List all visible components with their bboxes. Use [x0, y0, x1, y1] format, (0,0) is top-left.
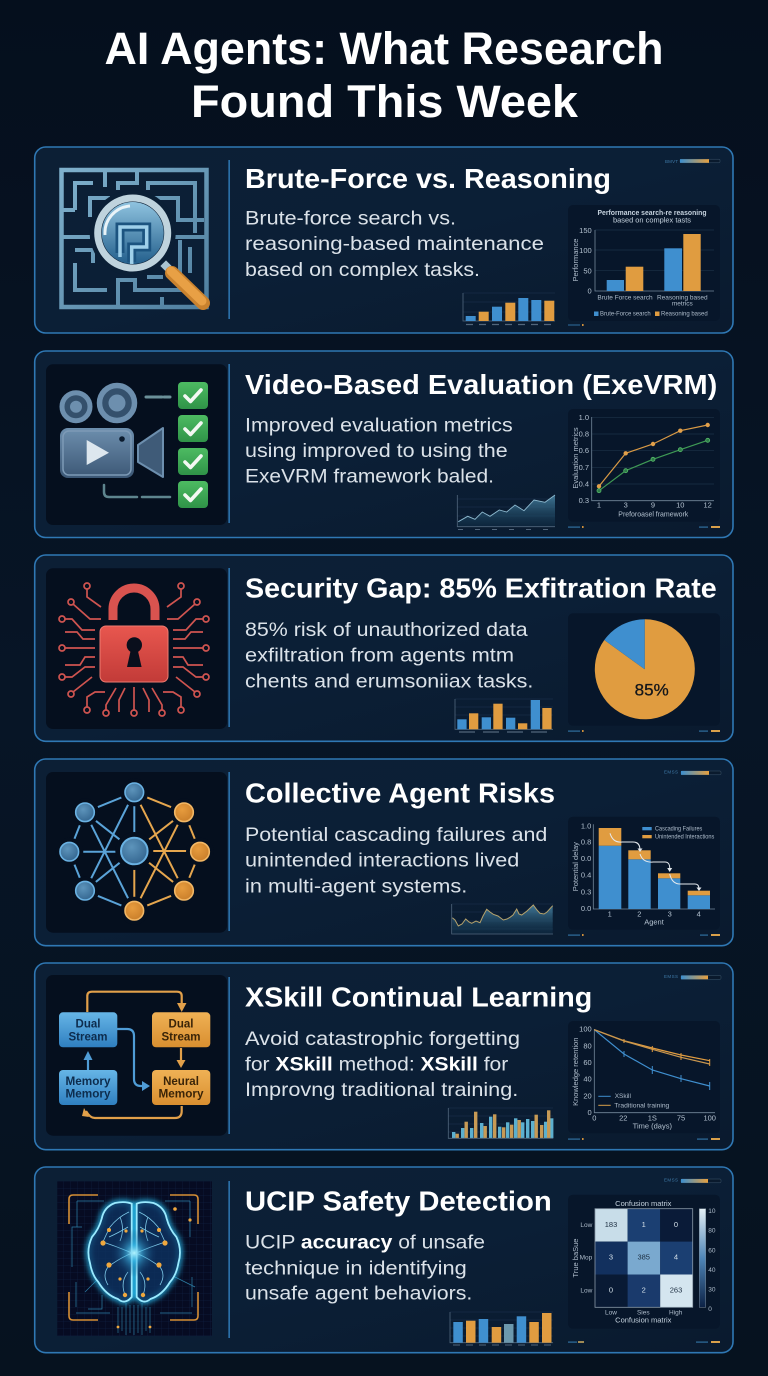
mini bar chart	[463, 293, 555, 324]
stacked bar chart: agent: 3	[668, 910, 672, 919]
line chart: knowledge retention	[568, 1021, 720, 1133]
confusion matrix: 183	[605, 1220, 617, 1229]
line chart: knowledge retention: 75	[677, 1114, 685, 1123]
text block: exfiltration from agents mtm	[245, 645, 514, 667]
line chart: evaluation metrics: Preforoasel framework	[618, 510, 689, 519]
text block: Potential cascading failures and	[245, 824, 547, 846]
confusion matrix: Mop	[580, 1255, 593, 1262]
bar chart: performance: metrics	[672, 301, 694, 308]
heading: UCIP Safety Detection	[245, 1185, 552, 1216]
confusion matrix: 263	[670, 1286, 682, 1295]
stacked bar chart: agent: Cascading Failures	[655, 826, 703, 833]
stacked bar chart: agent: 1	[608, 910, 612, 919]
confusion matrix: Low	[605, 1309, 617, 1316]
stacked bar chart: agent: Agent	[644, 917, 665, 926]
text block: unsafe agent behaviors.	[245, 1283, 472, 1305]
line chart: knowledge retention: 0	[592, 1114, 596, 1123]
text block	[245, 414, 513, 488]
confusion matrix: 0	[674, 1220, 678, 1229]
text block: unintended interactions lived	[245, 850, 519, 872]
mini area chart	[457, 495, 555, 530]
pie chart: 85%	[568, 613, 720, 726]
title	[104, 23, 664, 127]
confusion matrix: 60	[708, 1248, 716, 1254]
confusion matrix	[568, 1195, 720, 1329]
confusion matrix: 4	[674, 1253, 678, 1262]
line chart: evaluation metrics: 1.0	[579, 413, 589, 422]
icon panel: memory flow diagram: Memory	[66, 1076, 111, 1088]
mini area chart	[452, 904, 553, 934]
text block: in multi-agent systems.	[245, 875, 467, 897]
line chart: evaluation metrics: 10	[676, 500, 684, 509]
text block: Improvng traditional training.	[245, 1079, 518, 1101]
text block: technique in identifying	[245, 1257, 467, 1279]
text block	[245, 1028, 520, 1101]
bar chart: performance: Performance search-re reasoning	[598, 208, 707, 217]
footer marks	[568, 324, 584, 326]
stacked bar chart: agent: 2	[637, 910, 641, 919]
line chart: knowledge retention: 80	[583, 1041, 592, 1050]
confusion matrix: High	[669, 1309, 683, 1316]
mini grouped bar chart	[448, 1108, 553, 1138]
pie chart: 85%: 85%	[635, 681, 669, 700]
text block: chents and erumsoniiax tasks.	[245, 670, 533, 692]
line chart: knowledge retention: 22	[619, 1114, 627, 1123]
meter	[665, 159, 720, 164]
confusion matrix: Low	[580, 1222, 593, 1229]
line chart: knowledge retention: 60	[583, 1058, 592, 1067]
line chart: evaluation metrics: 0.4	[579, 480, 589, 488]
confusion matrix: Sies	[637, 1309, 650, 1316]
stacked bar chart: agent	[568, 817, 720, 930]
heading: Video-Based Evaluation (ExeVRM)	[245, 369, 717, 400]
stacked bar chart: agent: 0.4	[581, 871, 591, 880]
icon panel: video camera and checks	[46, 364, 230, 525]
confusion matrix: True baSue	[571, 1239, 580, 1277]
bar chart: performance: Brute Force search	[597, 294, 653, 301]
heading: Collective Agent Risks	[245, 777, 555, 808]
text block: for XSkill method: XSkill for	[245, 1054, 509, 1076]
stacked bar chart: agent: 0.8	[581, 837, 591, 846]
confusion matrix: Confusion matrix	[615, 1199, 672, 1208]
bar chart: performance: 100	[579, 246, 592, 255]
line chart: knowledge retention: 20	[583, 1091, 592, 1100]
text block: Avoid catastrophic forgetting	[245, 1028, 520, 1050]
bar chart: performance: Brute-Force search	[600, 311, 651, 318]
bar chart: performance: 50	[583, 266, 592, 276]
line chart: knowledge retention: Traditional training	[614, 1102, 670, 1109]
icon: maze with magnifying glass	[62, 170, 206, 307]
text block: reasoning-based maintenance	[245, 233, 544, 255]
line chart: evaluation metrics: 9	[651, 500, 655, 509]
line chart: knowledge retention: 100	[703, 1114, 716, 1123]
stacked bar chart: agent: Unintended Interactions	[655, 833, 715, 840]
footer marks	[568, 1138, 720, 1140]
line chart: evaluation metrics: 3	[624, 500, 628, 509]
line chart: evaluation metrics: 1	[597, 500, 601, 509]
title: Found This Week	[191, 76, 579, 127]
meter: EMSS	[664, 770, 678, 774]
heading: Brute-Force vs. Reasoning	[245, 163, 611, 194]
text block	[245, 1232, 485, 1305]
confusion matrix: 3	[609, 1253, 613, 1262]
confusion matrix: 40	[708, 1267, 716, 1274]
text block: 85% risk of unauthorized data	[245, 619, 528, 641]
mini bar chart	[455, 699, 553, 732]
text block: ExeVRM framework baled.	[245, 466, 494, 488]
bar chart: performance	[568, 205, 720, 321]
footer marks	[568, 526, 720, 528]
confusion matrix: 10	[708, 1208, 716, 1215]
confusion matrix: Confusion matrix	[615, 1316, 672, 1325]
confusion matrix: 0	[708, 1306, 712, 1313]
meter	[664, 770, 721, 775]
line chart: evaluation metrics	[568, 409, 720, 522]
footer marks	[568, 1341, 720, 1343]
text block: UCIP accuracy of unsafe	[245, 1232, 485, 1254]
stacked bar chart: agent: 4	[697, 910, 701, 919]
bar chart: performance: based on complex tasts	[613, 216, 691, 225]
confusion matrix: 2	[642, 1286, 646, 1295]
bar chart: performance: Reasoning based	[657, 294, 708, 301]
line chart: knowledge retention: 1S	[648, 1114, 657, 1123]
panel: video-based evaluation	[35, 351, 733, 538]
text block: Improved evaluation metrics	[245, 414, 513, 436]
line chart: evaluation metrics: 12	[704, 500, 712, 509]
confusion matrix: 1	[642, 1220, 646, 1229]
line chart: knowledge retention: 0	[588, 1108, 592, 1117]
footer marks	[568, 934, 720, 936]
icon panel: agent network	[46, 772, 230, 933]
line chart: evaluation metrics: 0.7	[579, 463, 589, 472]
text block: using improved to using the	[245, 440, 508, 462]
stacked bar chart: agent: 1.0	[581, 821, 591, 830]
heading: Security Gap: 85% Exfitration Rate	[245, 572, 717, 603]
line chart: evaluation metrics: Evaluation metrics	[571, 427, 580, 489]
mini bar chart	[450, 1312, 553, 1345]
confusion matrix: 30	[708, 1286, 716, 1294]
heading: XSkill Continual Learning	[245, 982, 592, 1013]
bar chart: performance: Reasoning based	[661, 311, 708, 318]
panel: xskill continual learning	[35, 963, 733, 1150]
panel: collective agent risks	[35, 759, 733, 946]
title: AI Agents: What Research	[104, 23, 664, 74]
meter	[664, 1178, 721, 1183]
line chart: knowledge retention: 40	[583, 1075, 592, 1084]
panel: security gap	[35, 555, 733, 741]
text block	[245, 824, 547, 897]
confusion matrix: 385	[637, 1253, 650, 1262]
line chart: evaluation metrics: 0.8	[579, 430, 589, 438]
meter: EMSS	[664, 1178, 678, 1182]
meter: BMVT	[665, 159, 678, 164]
confusion matrix: 80	[708, 1228, 716, 1234]
panel: ucip safety detection	[35, 1167, 733, 1353]
icon panel: memory flow diagram: Memory	[66, 1089, 111, 1101]
text block: Brute-force search vs.	[245, 207, 456, 229]
icon panel: memory flow diagram: Stream	[162, 1031, 200, 1043]
stacked bar chart: agent: Potential delay	[571, 842, 580, 891]
line chart: knowledge retention: Time (days)	[633, 1121, 672, 1130]
text block: based on complex tasks.	[245, 259, 480, 281]
line chart: evaluation metrics: 0.3	[579, 496, 589, 505]
icon panel: memory flow diagram: Memory	[158, 1089, 204, 1101]
line chart: knowledge retention: XSkill	[615, 1093, 632, 1100]
panel: brute-force vs reasoning	[35, 147, 733, 333]
icon: glowing brain	[57, 1181, 212, 1336]
icon panel: padlock with circuit traces	[46, 568, 230, 729]
icon panel: memory flow diagram: Stream	[68, 1031, 108, 1043]
confusion matrix: 0	[609, 1286, 613, 1295]
meter: EMSS	[664, 974, 678, 979]
text block	[245, 619, 533, 692]
bar chart: performance: 0	[588, 286, 592, 296]
icon panel: memory flow diagram: Dual	[76, 1019, 100, 1031]
line chart: evaluation metrics: 0.6	[579, 446, 589, 455]
icon panel: memory flow diagram: Neural	[163, 1076, 199, 1088]
line chart: knowledge retention: Knowledge retention	[571, 1038, 580, 1106]
stacked bar chart: agent: 0.3	[581, 887, 591, 896]
text block	[245, 207, 544, 281]
bar chart: performance: Performance	[571, 239, 580, 281]
footer marks	[568, 730, 720, 732]
confusion matrix: Low	[580, 1288, 593, 1295]
icon panel: memory flow diagram	[46, 975, 230, 1136]
bar chart: performance: 150	[579, 226, 592, 235]
meter	[664, 974, 721, 979]
stacked bar chart: agent: 0.0	[581, 854, 591, 863]
line chart: knowledge retention: 100	[579, 1025, 592, 1034]
icon panel: memory flow diagram: Dual	[169, 1019, 193, 1031]
stacked bar chart: agent: 0.0	[581, 904, 591, 913]
